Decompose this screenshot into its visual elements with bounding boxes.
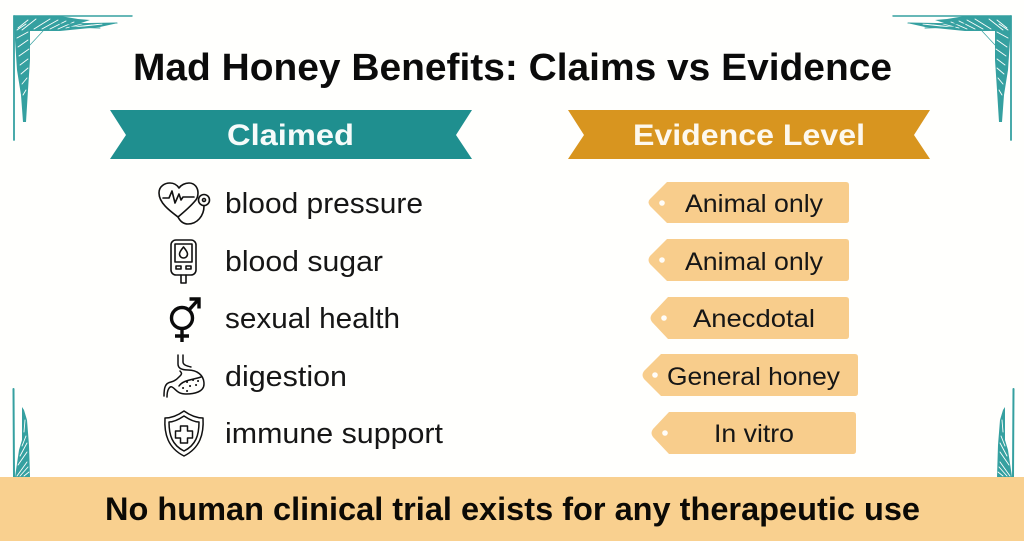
label: sexual health: sexual health [225,303,400,335]
tag: Animal only (blood sugar) [648,239,849,281]
icon: glucose meter [171,240,196,283]
icon: shield with cross [165,411,203,456]
row: immune support [165,411,443,456]
label: blood sugar: blood sugar [225,246,383,278]
tag: Animal only (blood sugar): Animal only [685,248,824,276]
tag: Animal only (blood pressure) [648,182,849,223]
tag: In vitro: In vitro [714,420,794,448]
row: blood sugar [171,240,383,283]
tag: General honey [642,354,858,396]
decoration: top-left corner flourish [14,16,132,140]
tag: Anecdotal: Anecdotal [693,305,815,333]
decoration: top-right corner flourish [893,16,1011,140]
footer banner [0,477,1024,541]
banner: Evidence Level [568,110,930,159]
label: immune support: immune support [225,418,443,450]
row: digestion [164,355,347,397]
banner: Claimed [110,110,472,159]
tag: Animal only (blood pressure): Animal only [685,190,824,218]
icon: male and female symbol [172,299,199,342]
banner: Claimed: Claimed [227,119,354,152]
icon: heart with stethoscope [159,183,210,224]
title: Mad Honey Benefits: Claims vs Evidence [133,47,892,89]
row: blood pressure [159,183,423,224]
tag: General honey: General honey [667,363,841,391]
row: sexual health [172,299,400,342]
footer banner: No human clinical trial exists for any therapeutic use [105,491,920,527]
tag: In vitro [652,412,856,454]
tag: Anecdotal [650,297,849,339]
label: blood pressure: blood pressure [225,188,423,220]
label: digestion: digestion [225,361,347,393]
banner: Evidence Level: Evidence Level [633,119,865,152]
icon: stomach [164,355,204,397]
decoration: bottom-right flourish [997,389,1014,477]
decoration: bottom-left flourish [14,389,30,477]
